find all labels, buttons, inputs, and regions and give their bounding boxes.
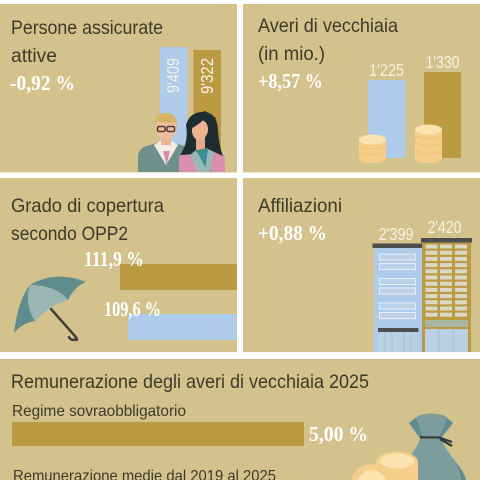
bar: 5,00 %: 5,00 % bbox=[309, 422, 368, 446]
bar: 9'409 bbox=[160, 47, 188, 152]
heading: Persone assicurate bbox=[11, 17, 163, 39]
heading: (in mio.) bbox=[258, 43, 325, 65]
bar: 111,9 %: 111,9 % bbox=[84, 247, 144, 271]
heading bbox=[11, 195, 164, 245]
panel: averi di vecchiaia bbox=[243, 4, 480, 172]
bar: 109,6 %: 109,6 % bbox=[104, 297, 161, 321]
building: 2'420: 2'420 bbox=[428, 217, 462, 237]
heading: secondo OPP2 bbox=[11, 223, 128, 245]
panel: persone assicurate attive bbox=[0, 4, 237, 172]
icon: woman bbox=[179, 111, 225, 172]
icon: coin stack large bbox=[415, 124, 442, 163]
percentage: +0,88 % bbox=[258, 221, 327, 245]
heading bbox=[11, 17, 163, 67]
heading: attive bbox=[11, 45, 57, 67]
bar: 5,00 % bbox=[12, 422, 368, 446]
bar: 9'409: 9'409 bbox=[163, 58, 183, 93]
bar: 1'330 bbox=[424, 52, 461, 158]
heading: Averi di vecchiaia bbox=[258, 15, 398, 37]
icon: coin stack small bbox=[359, 134, 386, 163]
bar: 109,6 % bbox=[104, 297, 237, 340]
bar: 9'322: 9'322 bbox=[197, 58, 217, 94]
percentage: -0,92 % bbox=[10, 71, 75, 95]
panel: affiliazioni bbox=[243, 178, 480, 352]
heading: Affiliazioni bbox=[258, 195, 342, 217]
icon: umbrella bbox=[14, 277, 86, 340]
building: 2'399 bbox=[372, 224, 422, 352]
bar: 1'225: 1'225 bbox=[369, 60, 404, 80]
building: 2'420 bbox=[421, 217, 472, 352]
bar: 9'322 bbox=[194, 50, 221, 150]
bar: 1'330: 1'330 bbox=[426, 52, 460, 72]
icon: coins bbox=[351, 452, 418, 480]
icon: money bag bbox=[402, 414, 466, 480]
icon: man bbox=[138, 113, 184, 172]
bar: 1'225 bbox=[368, 60, 406, 158]
bar: 111,9 % bbox=[84, 247, 237, 290]
heading: Grado di copertura bbox=[11, 195, 164, 217]
percentage: +8,57 % bbox=[258, 69, 323, 93]
panel: remunerazione bbox=[0, 359, 480, 480]
heading: Remunerazione degli averi di vecchiaia 2025 bbox=[11, 371, 369, 393]
heading bbox=[258, 15, 398, 65]
panel: grado di copertura bbox=[0, 178, 237, 352]
building: 2'399: 2'399 bbox=[378, 224, 414, 244]
label: regime sovraobbligatorio: Regime sovraobbligatorio bbox=[12, 403, 186, 420]
